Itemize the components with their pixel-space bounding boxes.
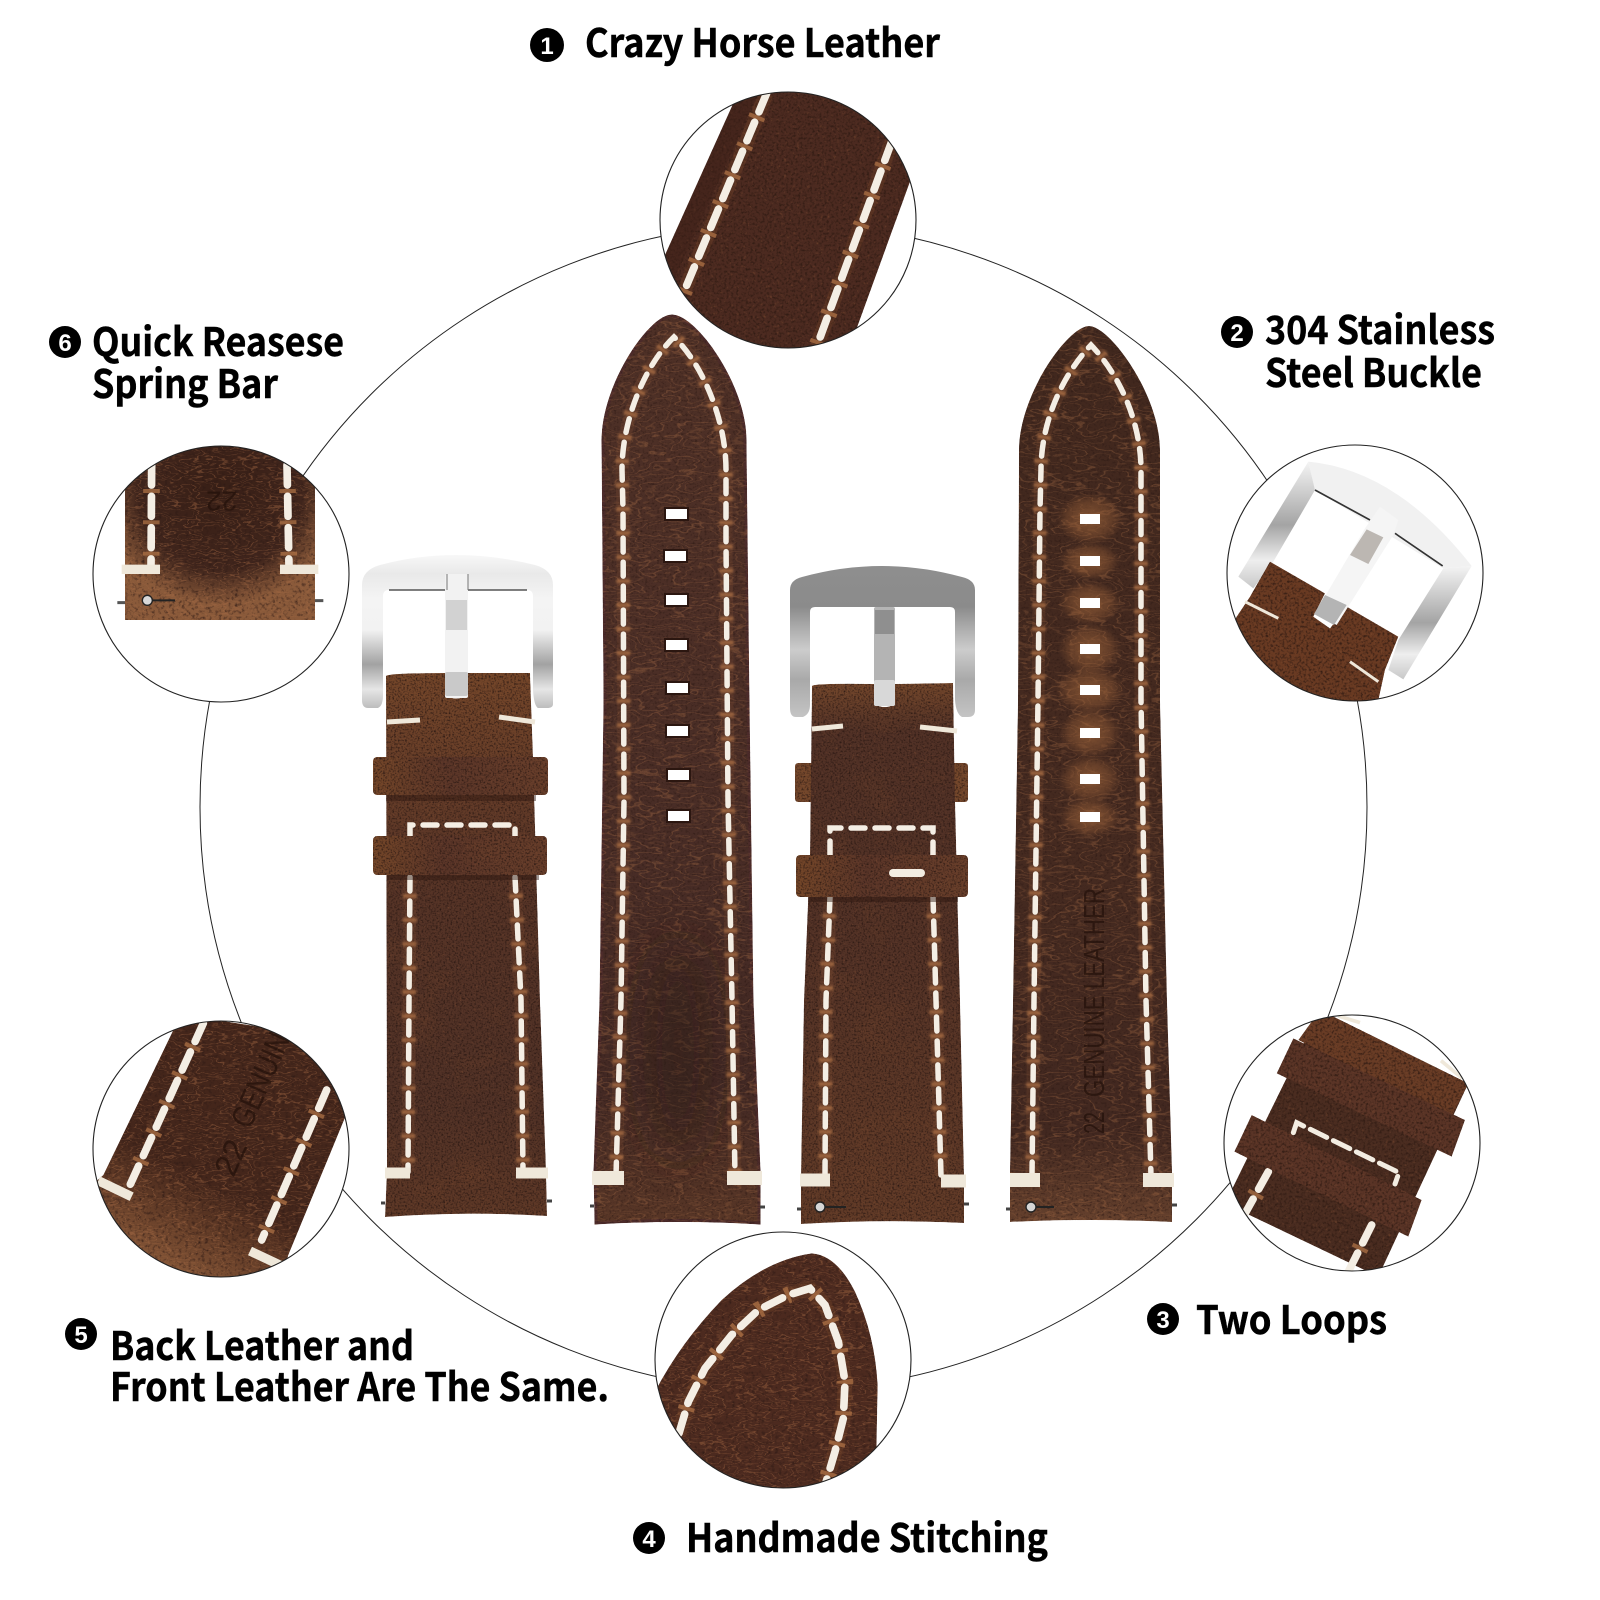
label 5: back leather and front leather: Front Leather Are The Same. — [110, 1357, 609, 1413]
label 4: handmade stitching: 4 — [642, 1526, 656, 1553]
label 2: 304 stainless steel buckle: 304 Stainless — [1265, 300, 1495, 356]
stamp: size 22: 22 — [206, 486, 237, 517]
stamp: size 22: 22 — [1079, 1112, 1111, 1134]
leather body — [385, 673, 547, 1217]
loop shadow — [808, 895, 958, 902]
label 6: quick release spring bar: Quick Reasese — [92, 312, 344, 368]
leather body — [1010, 326, 1172, 1222]
leather body — [801, 683, 964, 1224]
stitch ticks — [1245, 602, 1378, 682]
label 3: two loops: 3 — [1156, 1307, 1170, 1334]
leather band — [665, 92, 910, 348]
strap end — [125, 433, 315, 620]
loop two — [373, 836, 547, 875]
stamp: size 22: 22 — [207, 1134, 254, 1181]
stitching — [151, 465, 289, 567]
holes — [664, 508, 690, 822]
label 1: crazy horse leather: Crazy Horse Leather — [585, 13, 941, 69]
stitching — [683, 93, 892, 347]
loop — [796, 855, 968, 897]
detail lens 2: stainless steel buckle — [1226, 444, 1484, 702]
loop stitch — [893, 869, 921, 877]
spring bar — [117, 595, 323, 605]
detail lens 3: two loops — [1224, 1010, 1480, 1277]
detail lens 1: leather surface — [659, 92, 917, 348]
end stitching bars — [385, 1168, 548, 1178]
loop one — [1277, 1038, 1465, 1157]
detail lens 6: quick release spring bar — [93, 433, 349, 702]
label 6: quick release spring bar: Spring Bar — [92, 354, 279, 410]
spring bar pin — [1026, 1202, 1054, 1212]
end stitching bars — [98, 1181, 283, 1267]
label 4: handmade stitching: Handmade Stitching — [686, 1508, 1048, 1564]
loop one — [373, 757, 548, 795]
dark lower patch — [643, 940, 713, 1160]
end stitching bars — [1010, 1173, 1174, 1187]
stitching — [1293, 1123, 1399, 1184]
hole halos — [1056, 493, 1124, 837]
stitching — [616, 337, 735, 1176]
stitch ticks — [1338, 1016, 1462, 1078]
label 6: quick release spring bar: 6 — [58, 330, 72, 357]
strap 3: front short strap with brushed buckle — [790, 566, 975, 1224]
stitching — [679, 1288, 845, 1483]
buckle frame — [1238, 462, 1472, 679]
buckle frame, polished — [362, 555, 553, 708]
rear loop tabs — [795, 763, 968, 802]
buckle tongue — [874, 607, 895, 706]
holes — [1080, 514, 1100, 822]
end stitching bars — [592, 1171, 762, 1185]
buckle tongue — [1314, 523, 1392, 625]
label 6: quick release spring bar — [49, 312, 344, 410]
spring bar pin — [815, 1202, 846, 1212]
label 5: back leather and front leather — [65, 1316, 609, 1413]
stitching — [1032, 345, 1151, 1176]
label 2: 304 stainless steel buckle — [1221, 300, 1495, 399]
buckle tongue — [445, 574, 468, 698]
detail lens 4: handmade stitching — [654, 1232, 912, 1488]
stamp: genuin: GENUIN — [224, 1027, 297, 1133]
loop one shadow — [386, 793, 536, 801]
label 2: 304 stainless steel buckle: Steel Buckle — [1265, 343, 1482, 399]
stitching — [130, 1023, 327, 1240]
label 2: 304 stainless steel buckle: 2 — [1230, 320, 1244, 347]
stamp: genuine leather: GENUINE LEATHER — [1079, 888, 1111, 1097]
keeper stitches — [387, 717, 535, 722]
label 5: back leather and front leather: Back Leather and — [110, 1316, 414, 1372]
strap tip — [658, 1253, 878, 1488]
end stitching bars — [122, 564, 318, 574]
leather body — [595, 316, 759, 1223]
body stitching — [408, 825, 523, 1172]
strap 4: long back strap with stamped text — [1006, 326, 1177, 1222]
body stitching — [825, 828, 941, 1176]
strap band — [1225, 1010, 1468, 1277]
loop two — [1234, 1115, 1422, 1237]
keeper stitches — [812, 726, 957, 731]
label 5: back leather and front leather: 5 — [74, 1322, 88, 1349]
strap 2: long back strap with holes — [590, 316, 765, 1223]
buckle frame, brushed — [790, 566, 975, 717]
connecting circle line — [200, 224, 1367, 1390]
leather tab — [1236, 562, 1398, 700]
label 3: two loops: Two Loops — [1196, 1290, 1387, 1346]
end stitching bars — [800, 1180, 966, 1181]
label 1: crazy horse leather: 1 — [540, 33, 554, 60]
detail lens 5: back leather — [92, 1020, 350, 1278]
strap band — [98, 1022, 345, 1276]
strap 1: front short strap with polished buckle — [362, 555, 553, 1217]
loop two shadow — [387, 873, 539, 880]
